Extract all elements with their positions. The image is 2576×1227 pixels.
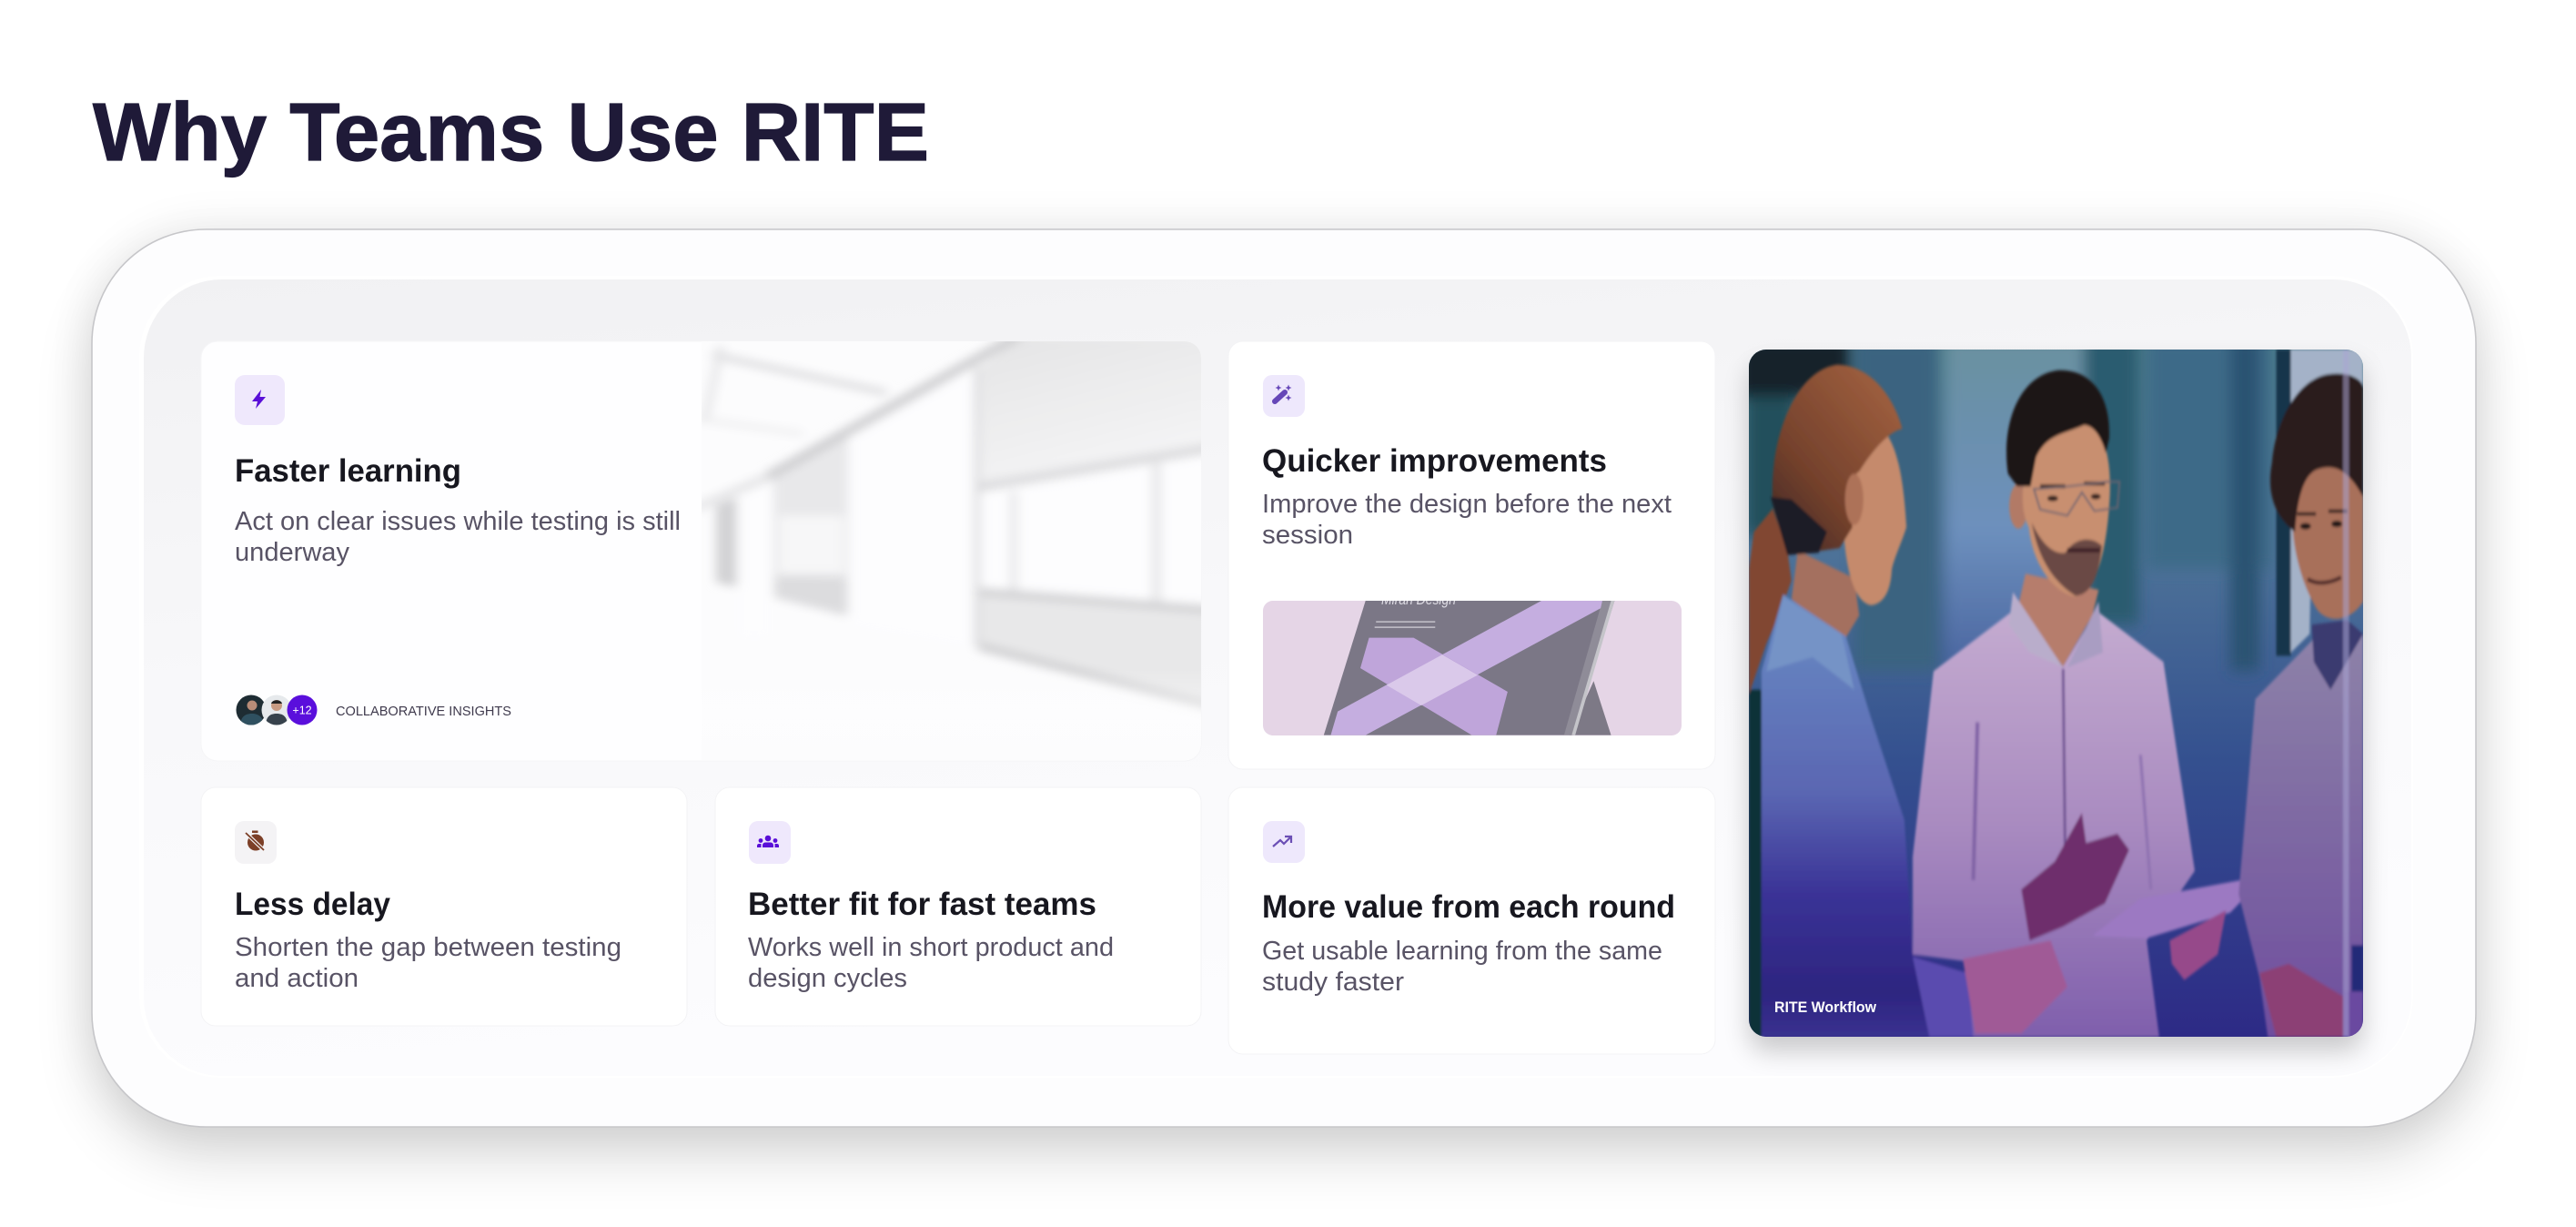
- image: tablet mockup: [1263, 591, 1682, 735]
- text: less delay description: Shorten the gap between testing: [235, 933, 621, 962]
- card: faster learning: [202, 341, 1201, 725]
- panel: inner tray: [144, 279, 2411, 1076]
- caption: rite workflow: RITE Workflow: [1774, 999, 1877, 1016]
- icon: lightning bolt: [235, 375, 285, 425]
- label: collaborative insights: COLLABORATIVE INSIGHTS: [336, 704, 511, 719]
- woman neck: [1792, 551, 1859, 641]
- card: quicker improvements: [1228, 341, 1715, 769]
- man shirt: [1913, 611, 2195, 1037]
- image text: tablet cover: Mirari Design: [1381, 591, 1456, 608]
- heading: quicker improvements: Quicker improvements: [1262, 443, 1607, 479]
- text: quicker improvements description: session: [1262, 521, 1353, 550]
- text: faster learning description: Act on clear issues while testing is still: [235, 507, 681, 536]
- title: Why Teams Use RITE: [93, 87, 929, 178]
- icon: team: [749, 821, 791, 864]
- card: more value from each round: [1228, 787, 1715, 1054]
- woman shirt: [1759, 593, 1929, 1037]
- heading: less delay: Less delay: [235, 887, 391, 922]
- woman ponytail: [1749, 509, 1792, 695]
- card: less delay: [201, 787, 687, 1026]
- text: more value description: Get usable learning from the same: [1262, 937, 1662, 966]
- woman hair: [1773, 365, 1903, 555]
- panel: team photo: [1737, 337, 2363, 1051]
- card: better fit for fast teams: [715, 787, 1201, 1026]
- panel: outer frame: [92, 228, 2476, 1156]
- text: less delay description: and action: [235, 964, 359, 993]
- icon: trending up: [1263, 821, 1305, 863]
- avatars: reviewers: +12: [292, 705, 312, 717]
- text: faster learning description: underway: [235, 538, 349, 567]
- image: blurred office hallway: [702, 341, 1201, 710]
- heading: faster learning: Faster learning: [235, 453, 461, 489]
- text: better fit description: Works well in short product and: [748, 933, 1114, 962]
- icon: timer off: [235, 821, 277, 864]
- heading: better fit for fast teams: Better fit for fast teams: [748, 887, 1096, 922]
- avatars: reviewers: [237, 695, 317, 726]
- woman hand: [1963, 940, 2067, 1033]
- heading: more value from each round: More value from each round: [1262, 889, 1675, 925]
- icon: magic wand: [1263, 375, 1305, 417]
- right man: [2238, 634, 2363, 1037]
- text: quicker improvements description: Improve the design before the next: [1262, 490, 1672, 519]
- woman face: [1844, 421, 1906, 605]
- text: more value description: study faster: [1262, 968, 1404, 997]
- text: better fit description: design cycles: [748, 964, 907, 993]
